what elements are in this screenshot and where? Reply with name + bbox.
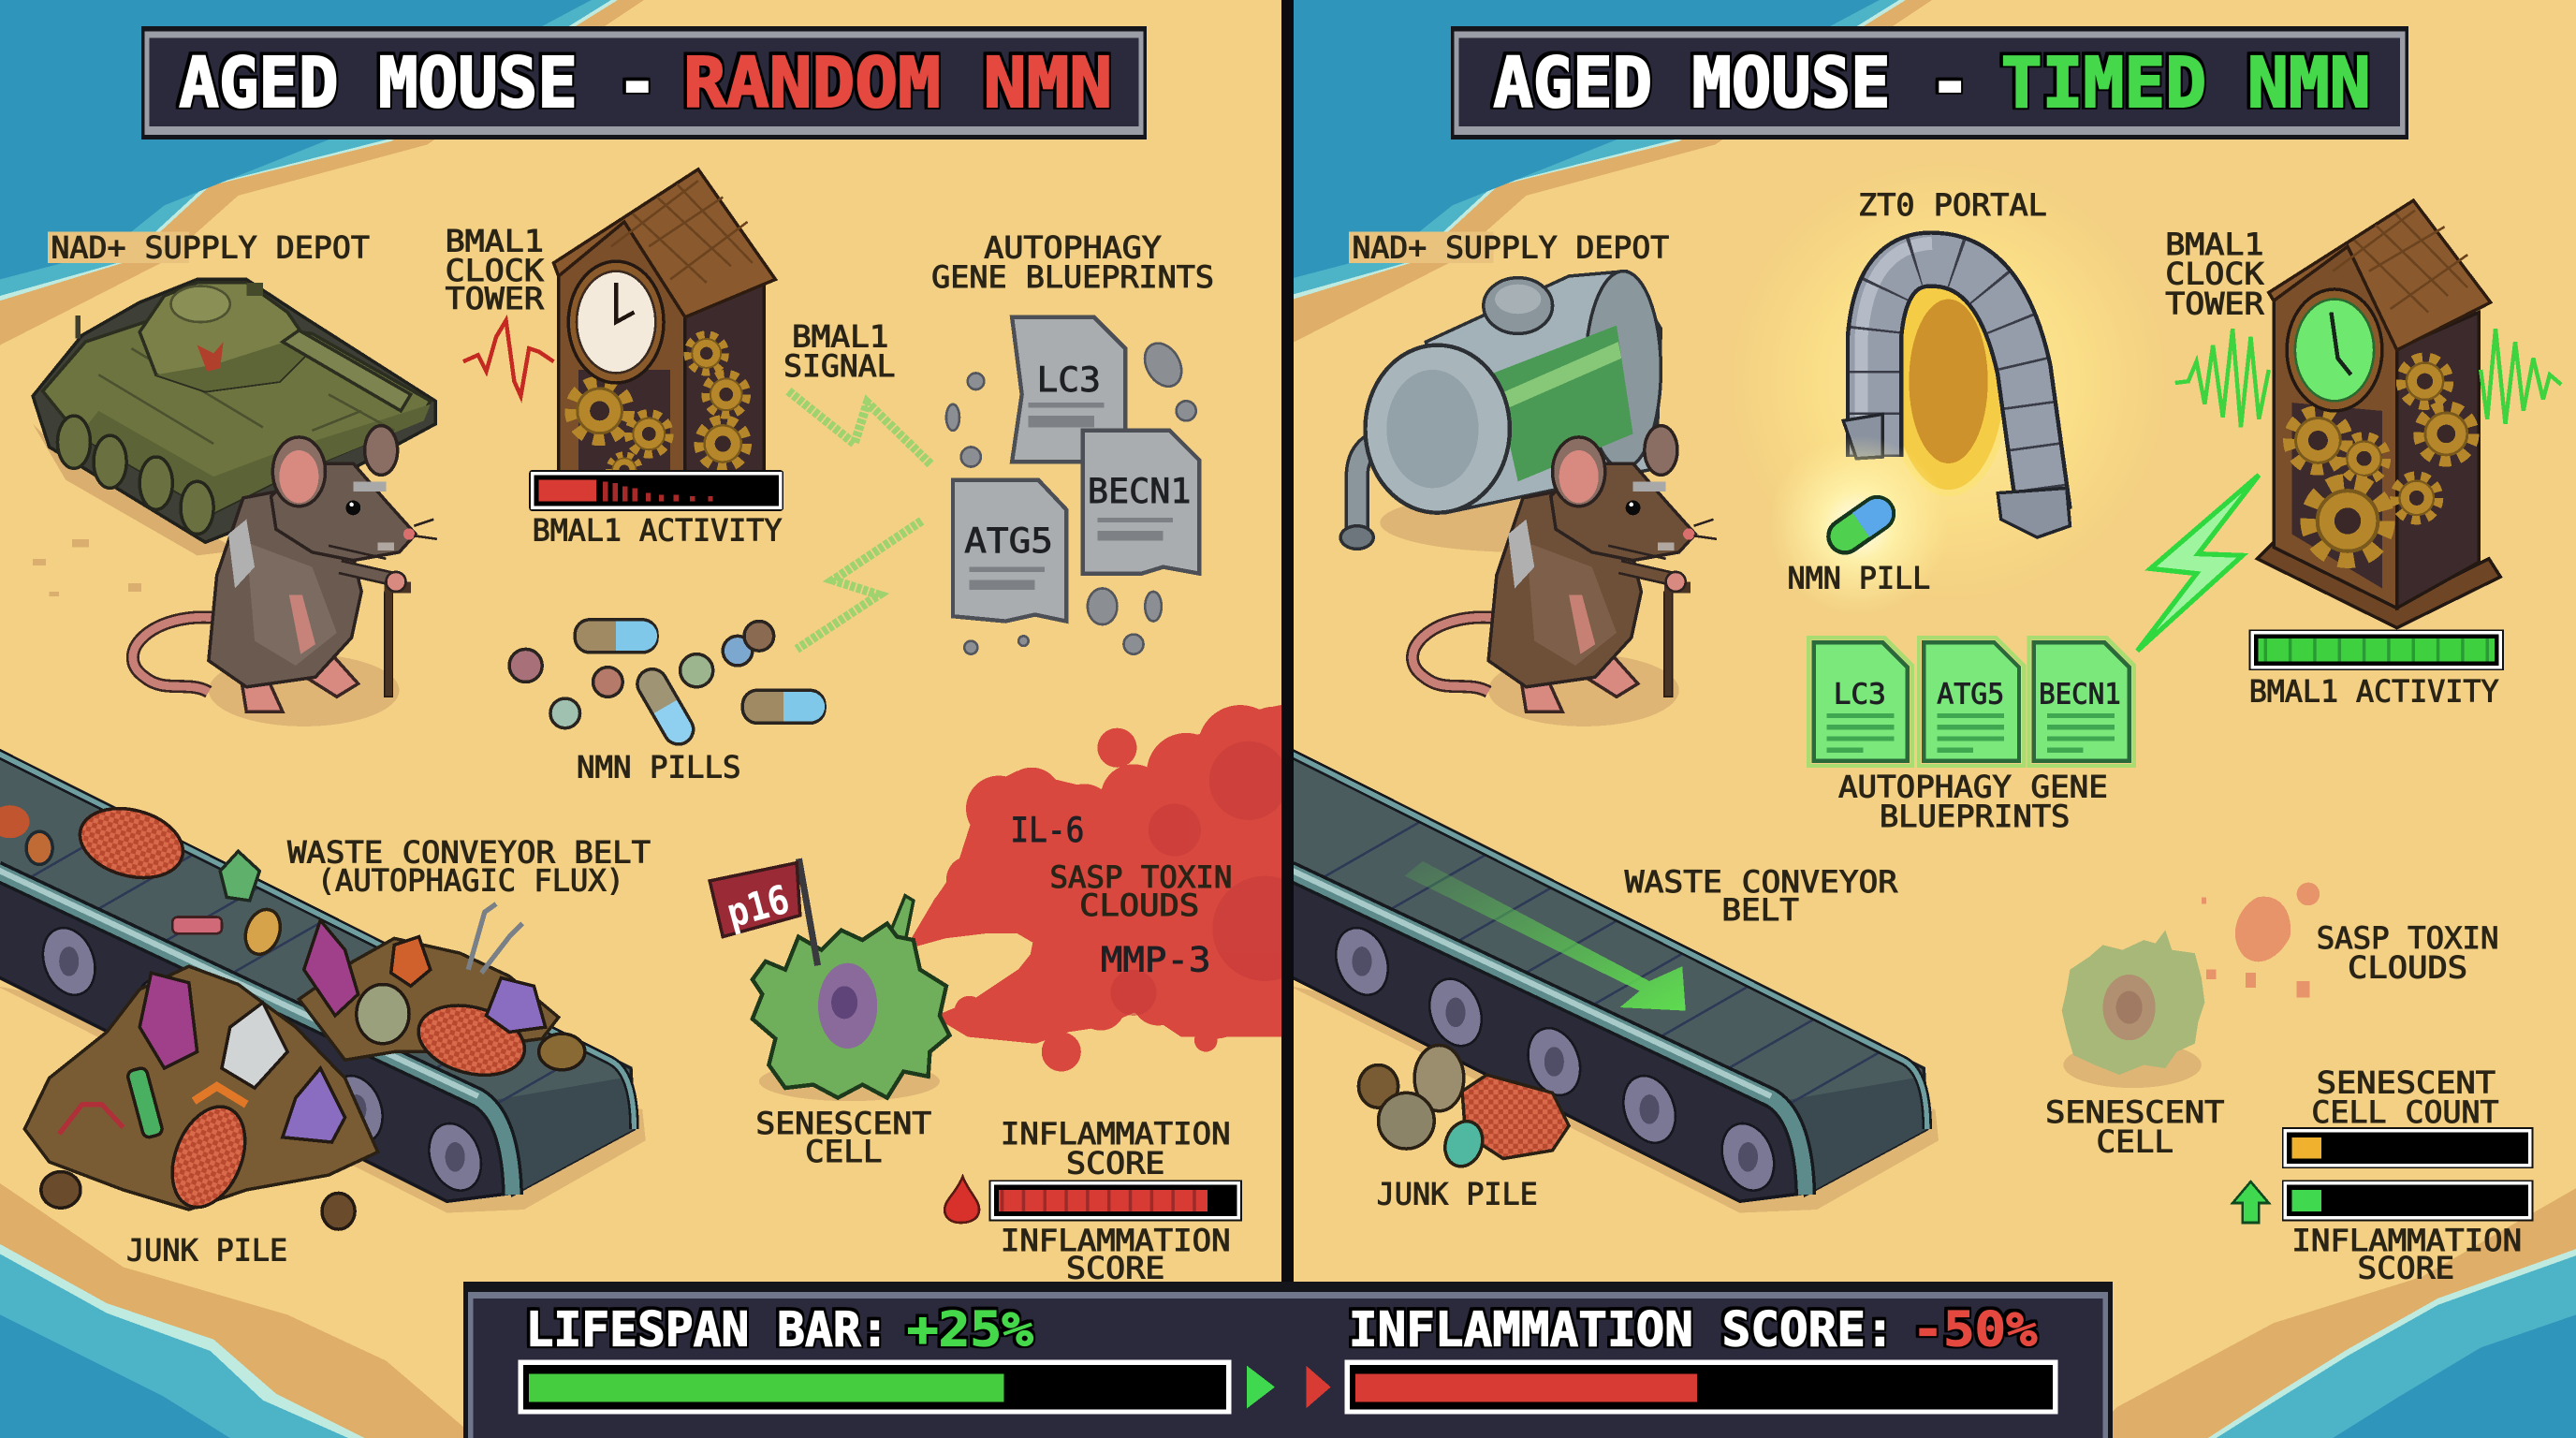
- icon: NAD+ supply depot tank: [33, 279, 435, 596]
- title: random NMN: RANDOM NMN: [683, 44, 1112, 124]
- icon: senescent cell with p16 flag: [710, 858, 949, 1101]
- labels: left panel: CELL: [805, 1136, 882, 1169]
- center divider: [1281, 0, 1294, 1290]
- labels: left panel: JUNK PILE: [126, 1234, 287, 1268]
- bar: inflammation: [1347, 1362, 2056, 1412]
- labels: left panel: TOWER: [446, 283, 545, 316]
- icon: faded BMAL1 signal upper: [788, 391, 931, 465]
- shoreline: top-left water: [0, 0, 644, 345]
- labels: right panel: AUTOPHAGY GENE: [1838, 770, 2108, 804]
- icon: LC3 blueprint: [1012, 317, 1125, 462]
- conveyor belt (right): [1290, 751, 1939, 1213]
- labels: right panel: CLOCK: [2165, 258, 2264, 292]
- junk on belt: [0, 798, 286, 959]
- labels: right panel: SENESCENT: [2317, 1066, 2496, 1100]
- labels: left panel: NMN PILLS: [577, 751, 741, 785]
- labels: right panel: NAD+ SUPPLY DEPOT: [1352, 232, 1669, 266]
- labels: left panel: SENESCENT: [755, 1108, 931, 1141]
- labels: left panel: WASTE CONVEYOR BELT: [287, 837, 651, 871]
- icon: faded senescent cell: [2062, 931, 2204, 1088]
- icon: BMAL1 clock tower (damaged): [553, 169, 775, 485]
- labels: right panel: SCORE: [2358, 1253, 2454, 1286]
- icon: ATG5 green blueprint: ATG5: [1937, 678, 2004, 711]
- labels: right panel: BELT: [1721, 894, 1799, 928]
- bar: senescent cell count: [2282, 1127, 2533, 1168]
- icon: ATG5 green blueprint: [1919, 638, 2024, 766]
- panel: random NMN (left): [0, 0, 1318, 1438]
- icon: red blood drop: [944, 1177, 979, 1223]
- labels: left panel: INFLAMMATION: [1001, 1225, 1231, 1258]
- labels: right panel: SENESCENT: [2045, 1096, 2224, 1130]
- icon: BECN1 green blueprint: BECN1: [2039, 678, 2121, 711]
- title: random NMN: [141, 26, 1147, 139]
- labels: left panel: BMAL1 ACTIVITY: [533, 515, 782, 549]
- arrow: green belt direction: [1405, 861, 1686, 1011]
- mouse: aged grey mouse with cane: [133, 426, 437, 726]
- icon: NAD+ supply tank: [1340, 271, 1661, 552]
- icon: BECN1 green blueprint: [2029, 638, 2134, 766]
- icon: junk pile: [24, 903, 585, 1229]
- labels: right panel: INFLAMMATION: [2291, 1225, 2522, 1258]
- icon: ATG5 blueprint: [953, 480, 1066, 622]
- labels: left panel: AUTOPHAGY: [984, 232, 1162, 266]
- shoreline: bottom-left water: [0, 1183, 476, 1438]
- title: timed NMN: AGED MOUSE -: [1493, 44, 1969, 124]
- arrow: green: [1247, 1366, 1275, 1408]
- labels: left panel: [48, 226, 1232, 1286]
- icon: BMAL1 clock tower (healthy): [2258, 200, 2500, 628]
- icon: small junk pile: [1358, 1045, 1569, 1171]
- labels: left panel: BMAL1: [446, 226, 544, 259]
- title: timed NMN: TIMED NMN: [2001, 44, 2371, 124]
- stat: inflammation heading: -50%: [1912, 1303, 2038, 1358]
- icon: LC3 green blueprint: [1808, 638, 1912, 766]
- labels: left panel: SIGNAL: [783, 350, 896, 384]
- icon: green up arrow: [2232, 1181, 2269, 1223]
- labels: left panel: NAD+ SUPPLY DEPOT: [51, 232, 370, 266]
- icon: green wave left: [2175, 329, 2269, 427]
- icon: ZT0 portal: [1727, 159, 2170, 603]
- bar: lifespan: [520, 1362, 1229, 1412]
- labels: right panel: JUNK PILE: [1377, 1179, 1538, 1212]
- bar: right BMAL1 activity: [2249, 629, 2504, 670]
- bar: BMAL1 activity: [529, 470, 783, 511]
- title: timed NMN: [1451, 26, 2408, 139]
- labels: right panel: ZT0 PORTAL: [1858, 189, 2047, 223]
- labels: left panel: BMAL1: [792, 320, 889, 354]
- labels: right panel: WASTE CONVEYOR: [1625, 866, 1898, 900]
- title: random NMN: AGED MOUSE -: [179, 44, 657, 124]
- labels: left panel: CLOUDS: [1079, 889, 1199, 923]
- icon: debris around blueprints: [946, 337, 1196, 654]
- icon: senescent cell with p16 flag: p16: [722, 876, 794, 936]
- labels: left panel: INFLAMMATION: [1001, 1118, 1231, 1152]
- labels: right panel: CLOUDS: [2348, 951, 2467, 985]
- labels: right panel: SASP TOXIN: [2317, 922, 2499, 956]
- icon: scattered NMN pills: [509, 620, 825, 750]
- icon: BECN1 blueprint: [1083, 431, 1199, 574]
- conveyor belt (left): [0, 751, 646, 1213]
- labels: left panel: GENE BLUEPRINTS: [931, 261, 1214, 295]
- shoreline: top-right water: [1288, 0, 1932, 345]
- labels: left panel: SCORE: [1066, 1253, 1164, 1286]
- icon: faded BMAL1 signal lower: [797, 521, 922, 649]
- labels: right panel: BMAL1: [2165, 228, 2264, 262]
- panel: timed NMN (right): [1288, 0, 2576, 1438]
- labels: left panel: SASP TOXIN: [1050, 861, 1232, 895]
- icon: red pulse wave: [463, 320, 553, 396]
- labels: left panel: IL-6: [1010, 810, 1084, 850]
- mouse: aged brown mouse with cane: [1412, 426, 1717, 726]
- icon: ATG5 blueprint: ATG5: [964, 521, 1053, 561]
- icon: green lightning bolt: [2137, 475, 2259, 651]
- icon: NMN pill glowing: [1767, 435, 1949, 616]
- stat: inflammation heading: INFLAMMATION SCORE:: [1349, 1303, 1895, 1358]
- labels: right panel: CELL: [2097, 1126, 2174, 1160]
- labels: right panel: BLUEPRINTS: [1880, 800, 2070, 834]
- stat: lifespan heading: +25%: [907, 1303, 1033, 1358]
- stat: lifespan heading: LIFESPAN BAR:: [526, 1303, 889, 1358]
- labels: right panel: [1349, 189, 2522, 1286]
- icon: BECN1 blueprint: BECN1: [1088, 471, 1191, 511]
- shoreline: bottom-right water: [2086, 1188, 2576, 1438]
- labels: left panel: MMP-3: [1101, 939, 1211, 979]
- icon: LC3 green blueprint: LC3: [1834, 678, 1886, 711]
- icon: SASP toxin cloud: [915, 705, 1318, 1072]
- icon: LC3 blueprint: LC3: [1036, 360, 1101, 400]
- labels: left panel: SCORE: [1066, 1147, 1164, 1181]
- labels: right panel: NMN PILL: [1788, 562, 1930, 595]
- labels: right panel: TOWER: [2165, 287, 2265, 321]
- arrow: red: [1306, 1366, 1331, 1408]
- panel: bottom stats: [463, 1282, 2113, 1438]
- icon: faded SASP toxin cloud: [2202, 883, 2320, 998]
- bar: right inflammation score: [2282, 1180, 2533, 1221]
- labels: left panel: CLOCK: [446, 255, 544, 288]
- bar: left inflammation score: [989, 1180, 1242, 1221]
- labels: right panel: BMAL1 ACTIVITY: [2249, 676, 2499, 710]
- labels: right panel: CELL COUNT: [2311, 1096, 2499, 1130]
- icon: green wave right: [2481, 329, 2561, 424]
- labels: left panel: (AUTOPHAGIC FLUX): [317, 864, 624, 898]
